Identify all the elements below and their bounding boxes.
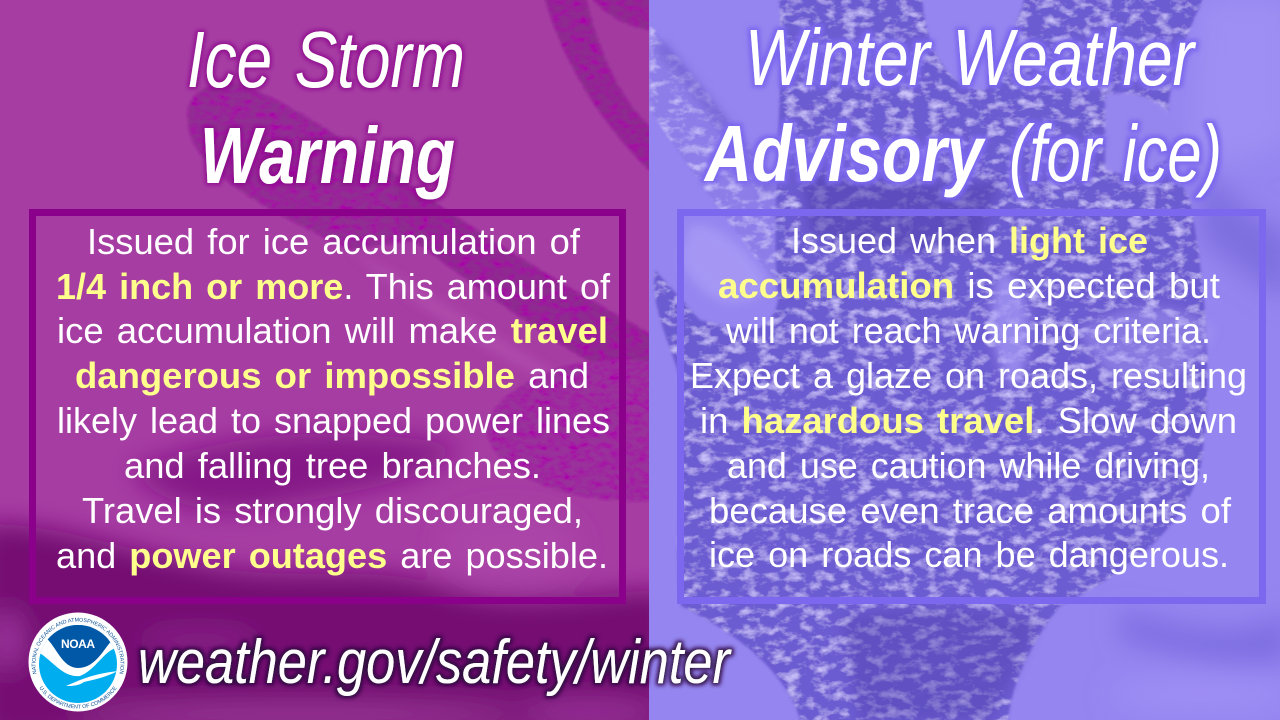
- panel: winter weather advisory text box: [680, 212, 1262, 600]
- text block: ice storm warning description: ice accumulation will make travel: [57, 310, 608, 351]
- text block: ice storm warning description: [56, 221, 611, 576]
- panel: winter weather background photo: [649, 0, 1280, 720]
- text block: ice storm warning description: and power outages are possible.: [56, 535, 608, 576]
- text block: winter weather advisory description: will not reach warning criteria.: [725, 310, 1211, 351]
- text block: winter weather advisory description: and use caution while driving,: [727, 445, 1210, 486]
- heading: Winter Weather Advisory (for ice): (for ice): [1009, 109, 1222, 198]
- icon: NOAA logo: NOAA: [61, 637, 95, 651]
- heading: Winter Weather Advisory (for ice): [703, 13, 1222, 198]
- text block: winter weather advisory description: in hazardous travel. Slow down: [700, 400, 1237, 441]
- heading: Ice Storm Warning: [187, 15, 465, 200]
- text block: ice storm warning description: likely lead to snapped power lines: [57, 400, 610, 441]
- text block: winter weather advisory description: Expect a glaze on roads, resulting: [690, 355, 1247, 396]
- panel: ice storm background photo: [0, 0, 670, 720]
- text block: ice storm warning description: 1/4 inch or more. This amount of: [56, 266, 611, 307]
- text block: ice storm warning description: Issued for ice accumulation of: [87, 221, 581, 262]
- icon: NOAA logo: [28, 612, 128, 712]
- heading: Winter Weather Advisory (for ice): Advisory: [703, 109, 986, 198]
- text block: ice storm warning description: dangerous or impossible and: [75, 355, 589, 396]
- text block: winter weather advisory description: because even trace amounts of: [709, 490, 1232, 531]
- icon: NOAA logo: NATIONAL OCEANIC AND ATMOSPHERIC ADMINISTRATION: [32, 618, 124, 674]
- text block: ice storm warning description: Travel is strongly discouraged,: [82, 490, 583, 531]
- panel: ice storm warning text box: [32, 212, 622, 600]
- text block: winter weather advisory description: ice on roads can be dangerous.: [709, 534, 1229, 575]
- text: website url: weather.gov/safety/winter: [138, 628, 732, 697]
- text block: winter weather advisory description: [690, 220, 1247, 575]
- icon: NOAA logo: U.S. DEPARTMENT OF COMMERCE: [40, 686, 117, 708]
- text block: ice storm warning description: and falling tree branches.: [124, 445, 541, 486]
- heading: Ice Storm Warning: Ice Storm: [187, 15, 465, 104]
- text block: winter weather advisory description: Issued when light ice: [791, 220, 1148, 261]
- text block: winter weather advisory description: accumulation is expected but: [718, 265, 1220, 306]
- heading: Ice Storm Warning: Warning: [200, 111, 455, 200]
